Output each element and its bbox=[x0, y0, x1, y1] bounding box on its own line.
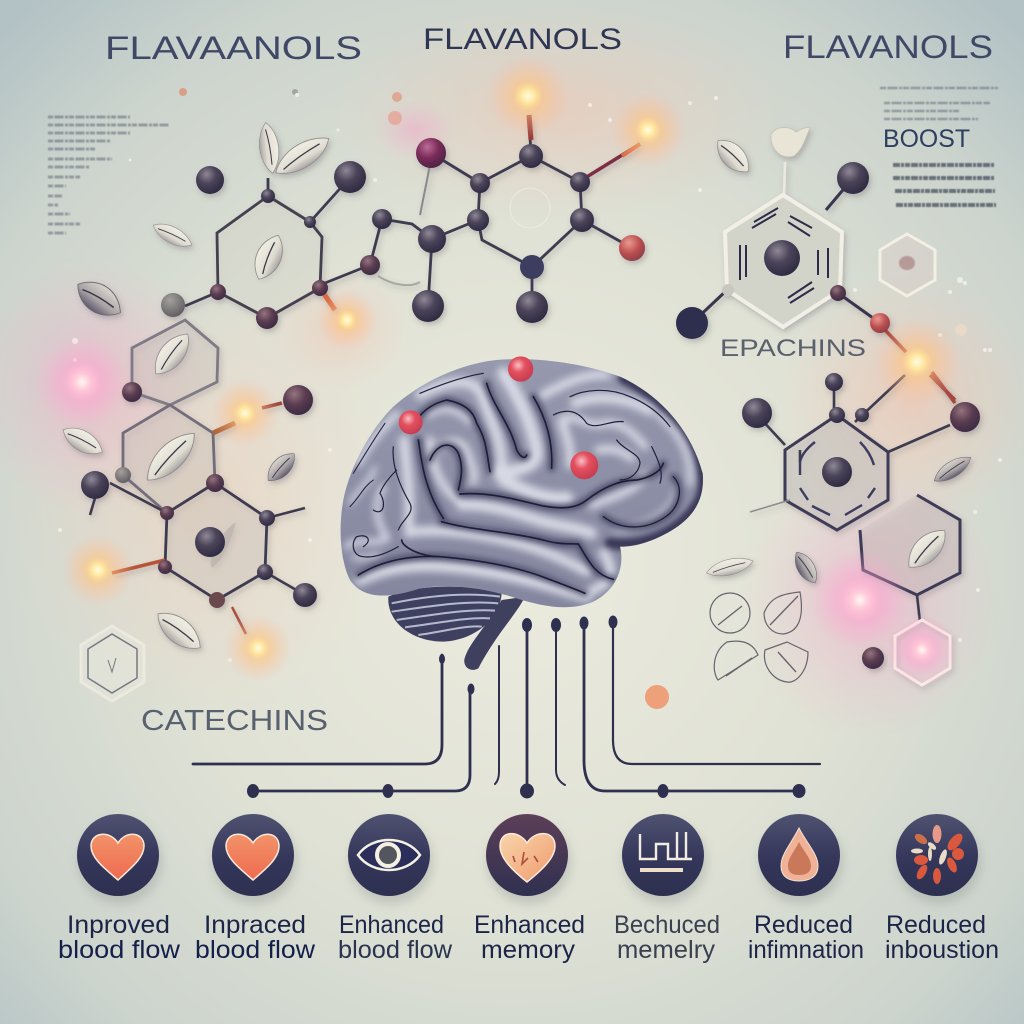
particles bbox=[58, 88, 1002, 662]
rear dark rim bbox=[610, 378, 703, 544]
text block: right lower caption bbox=[893, 165, 996, 205]
groove lines bbox=[350, 373, 679, 593]
heading: boost: BOOST bbox=[883, 125, 970, 153]
icon: small hexagon right bbox=[880, 234, 935, 296]
cerebrum folds bbox=[347, 373, 703, 597]
benefit 3 bbox=[338, 814, 453, 964]
cerebrum base bbox=[341, 359, 703, 607]
benefit 4 bbox=[474, 814, 585, 964]
molecule: upper left hexagon bbox=[70, 122, 366, 329]
benefit 1: blood flow bbox=[58, 936, 181, 964]
red spot left bbox=[399, 410, 423, 434]
benefit 3: blood flow bbox=[338, 936, 453, 964]
cerebellum bbox=[388, 587, 502, 642]
connector lines to benefits bbox=[193, 616, 820, 798]
benefit 6 bbox=[748, 814, 864, 964]
glow: orange lights bbox=[62, 54, 961, 682]
title centre: FLAVANOLS bbox=[423, 23, 622, 56]
benefit 5: memelry bbox=[617, 936, 716, 964]
molecule: centre top bbox=[320, 115, 645, 323]
benefit 7 bbox=[885, 814, 999, 964]
benefit 6: Reduced bbox=[754, 911, 853, 939]
brain illustration bbox=[341, 356, 703, 670]
molecule: left hexagon chain bbox=[58, 320, 317, 658]
brain stem bbox=[464, 597, 525, 670]
icon: hexagon badge lower left bbox=[81, 626, 144, 701]
molecule: lower right hexagons bbox=[705, 372, 980, 685]
label: catechins: CATECHINS bbox=[141, 705, 328, 737]
red spot right bbox=[570, 451, 598, 479]
text block: left blurred caption bbox=[48, 117, 170, 233]
benefit 1 bbox=[58, 814, 181, 964]
benefit 2: Inpraced bbox=[204, 911, 306, 939]
benefit 5 bbox=[614, 814, 720, 964]
background glow haze bbox=[0, 0, 1024, 740]
benefit 7: Reduced bbox=[886, 911, 986, 939]
soft groove shadows bbox=[358, 383, 679, 593]
glow: pink lights bbox=[36, 336, 958, 686]
benefit 1: Inproved bbox=[67, 911, 170, 939]
benefit 2 bbox=[195, 814, 316, 964]
text block: right upper caption bbox=[880, 88, 998, 119]
title left: FLAVAANOLS bbox=[105, 30, 362, 66]
faint ring inside centre hexagon bbox=[510, 188, 550, 228]
benefit 7: inboustion bbox=[885, 936, 999, 964]
red spot top bbox=[508, 356, 533, 382]
benefit 3: Enhanced bbox=[339, 911, 444, 939]
benefit 5: Bechuced bbox=[614, 911, 720, 939]
orange dot bbox=[645, 685, 669, 709]
benefit 4: memory bbox=[481, 936, 576, 964]
benefit 2: blood flow bbox=[195, 936, 316, 964]
molecule: upper right hexagon bbox=[676, 127, 955, 400]
benefit 6: infimnation bbox=[748, 936, 864, 964]
label: epachins: EPACHINS bbox=[720, 335, 866, 362]
benefit 4: Enhanced bbox=[474, 911, 585, 939]
icon group: outlined leaf circles bbox=[710, 592, 808, 682]
light tube highlights bbox=[347, 373, 690, 597]
title right: FLAVANOLS bbox=[783, 29, 993, 65]
